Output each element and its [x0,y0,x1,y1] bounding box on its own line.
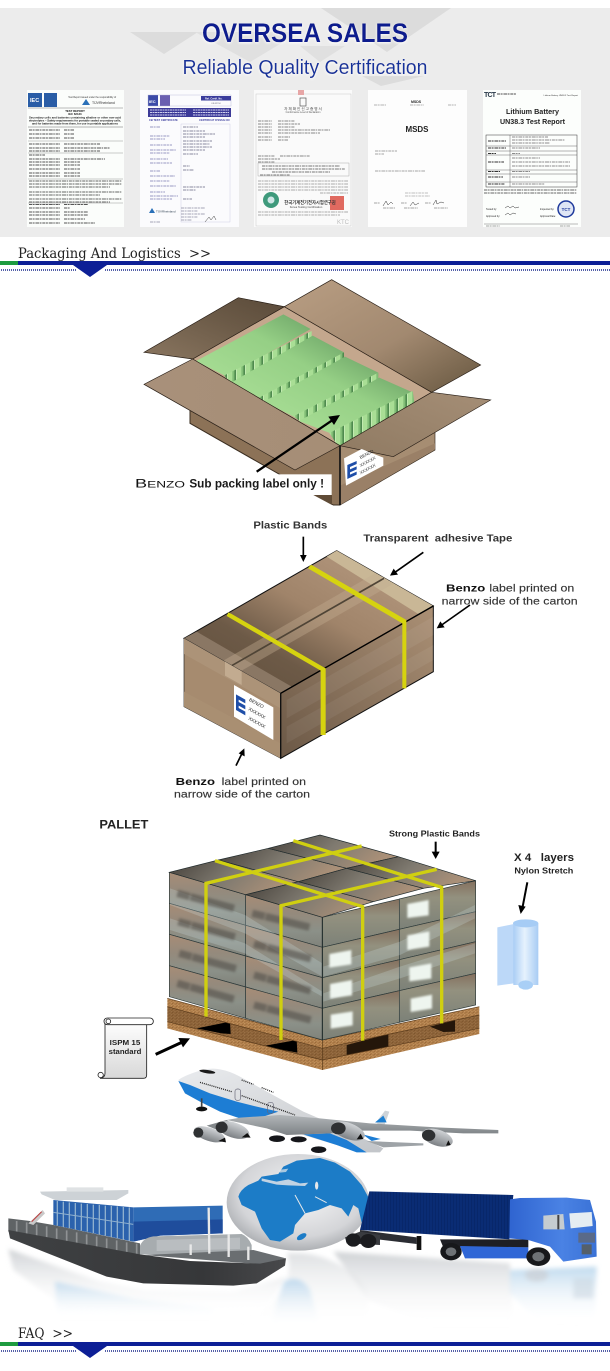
certificate: MSDS: MSDS [406,125,429,134]
carton label: XXXXXX [248,716,267,730]
certificate: TCT lithium battery test report: UN38.3 Test Report [500,117,565,126]
label: transparent adhesive tape: Transparent adhesive Tape [363,534,513,545]
flaps [144,280,491,470]
label: benzo label printed, right: label printed on [489,584,575,595]
stretch film overlay [170,888,475,1002]
section heading: packaging and logistics [0,246,610,277]
icon: nylon stretch film roll [497,919,538,990]
certificate: CB test certificate: CERTIFICAT D'ESSAI OC [199,118,230,122]
certificate: CB test certificate: TÜVRheinland [156,210,176,214]
certificate: TCT lithium battery test report: Approval Date: [540,215,556,218]
certificate: TCT lithium battery test report: Tested by: [486,208,497,211]
certificate: Korean conformity declaration: 한국기계전기전자시험연구원 [284,199,336,206]
reflections on the glossy floor [240,1252,597,1327]
caption: sub packing label: Sub packing label only ! [189,476,324,490]
section heading: FAQ [0,1326,610,1358]
boxes: right face [322,881,476,1040]
label: plastic bands [253,520,328,562]
icon: ISPM 15 scroll: ISPM 15 [110,1038,141,1047]
boxes: top face [169,835,476,917]
certificate: MSDS [368,90,467,227]
illustration: container ship [8,1187,286,1286]
wooden pallet [167,998,479,1070]
section heading: FAQ: FAQ >> [18,1326,73,1342]
carton label: XXXXXX [248,706,267,720]
panel: certification header [0,8,610,237]
certificate: IEC test report: Test Report issued under the responsibility of [68,96,116,99]
label: benzo label printed, right: narrow side of the carton [442,597,578,608]
carton label [234,685,273,740]
certificate: IEC test report: TÜVRheinland [92,101,115,105]
label: benzo label printed, right: Benzo [446,584,485,595]
arrow: scroll to pallet [156,1038,190,1054]
label: benzo label printed, bottom: label printed on [222,777,306,788]
label: plastic bands: Plastic Bands [253,520,328,531]
certificate: CB test certificate [140,90,239,227]
tail stabiliser [367,1141,423,1147]
label: nylon stretch layers [514,852,574,914]
blurred box labels: left [177,893,313,1021]
icon: ISPM 15 scroll: standard [109,1047,142,1056]
label: nylon stretch layers: X 4 layers [514,852,574,864]
carton top face [184,551,433,693]
certificate: IEC test report: Secondary cells and batteries containing alkaline or other non-acid [29,116,121,120]
yellow plastic bands [227,565,406,735]
certificate: Korean conformity declaration: Conformance Level of Declaration [286,111,321,114]
boxes: left face [169,872,322,1040]
carton side label: BENZO [359,448,375,460]
strong plastic bands [206,841,442,1041]
carton long side [281,606,433,758]
certificate: CB test certificate: KR-52734 [211,103,221,105]
label: transparent adhesive tape [363,534,513,576]
label: benzo label printed, bottom: narrow side of the carton [174,789,310,800]
subtitle: Reliable Quality Certification [182,56,428,79]
certificate: TCT lithium battery test report [483,90,581,227]
certificate: TCT lithium battery test report: TCT [562,207,571,212]
section heading: packaging and logistics: Packaging And Logistics >> [18,246,211,262]
carton body [190,410,435,505]
fuselage [178,1069,383,1152]
illustration: globe [227,1154,369,1251]
trailer [360,1191,513,1239]
carton narrow side [184,638,281,758]
label: strong plastic bands: Strong Plastic Bands [389,829,480,839]
certificate: IEC test report: electrolytes – Safety requirements for portable sealed secondary cells, [29,118,121,122]
deck rails [8,1218,140,1255]
superstructure [140,1234,252,1255]
certificate: TCT lithium battery test report: TCT [484,92,497,99]
title: OVERSEA SALES [202,18,408,48]
engines [192,1118,455,1150]
certificate: Korean conformity declaration [254,90,352,227]
diagram: open carton with sub packing [133,280,491,505]
certificate: TCT lithium battery test report: Inspected by: [540,208,555,211]
caption: sub packing label: BENZO [135,476,185,490]
certificate: CB test certificate: IEC [149,99,156,104]
diagram: pallet [98,817,574,1078]
bridge [40,1190,128,1200]
label: benzo label printed, bottom [174,748,310,800]
certificate: IEC test report [27,90,124,227]
containers [133,1206,223,1242]
arrow: to sub packing [257,415,340,472]
illustration: airplane [178,1069,498,1153]
icon: ISPM 15 scroll [98,1018,153,1078]
carton side label [344,448,383,486]
label: nylon stretch layers: Nylon Stretch [514,865,573,875]
label: benzo label printed, bottom: Benzo [176,777,215,788]
hull [8,1230,286,1286]
certificate: TCT lithium battery test report: Lithium Battery UN38.3 Test Report [544,94,578,97]
heading: pallet: PALLET [99,817,149,831]
certificate: IEC test report: TEST REPORT [65,109,85,113]
certificate: IEC test report: IEC 62133 [68,112,82,116]
windows and doors [200,1080,295,1115]
label: benzo label printed, right [437,584,578,628]
tail [376,1111,389,1128]
certificate: IEC test report: IEC [30,98,39,104]
label: strong plastic bands [389,829,480,859]
ship reflection [8,1249,287,1318]
carton side label: XXXXXX [359,463,377,475]
certificate: MSDS: MSDS [411,100,422,104]
certificate: Korean conformity declaration: Korea Testing Certification [290,205,323,209]
diagram: sealed carton with plastic bands [174,520,578,800]
carton side label: XXXXXX [359,455,377,468]
certificate: TCT lithium battery test report: Approved by: [486,215,500,218]
green foam dividers [196,314,415,447]
carton label: BENZO [248,697,265,709]
landing gear [199,1098,204,1107]
certificate: IEC test report: and for batteries made from them, for use in portable applications [32,122,118,126]
carton opening [193,307,432,446]
certificate: TCT lithium battery test report: Lithium Battery [506,107,560,116]
blurred box labels: right [329,900,432,1029]
certificate: Korean conformity declaration: 자 체 확 인 신 고 증 명 서 [284,106,322,111]
illustration: truck [345,1191,597,1266]
wings [227,1115,498,1135]
certificate: CB test certificate: Ref. Certif. No. [205,98,223,100]
tractor [440,1239,528,1247]
certificate: CB test certificate: CB TEST CERTIFICATE [149,118,178,122]
certificate: Korean conformity declaration: KTC [337,220,350,226]
